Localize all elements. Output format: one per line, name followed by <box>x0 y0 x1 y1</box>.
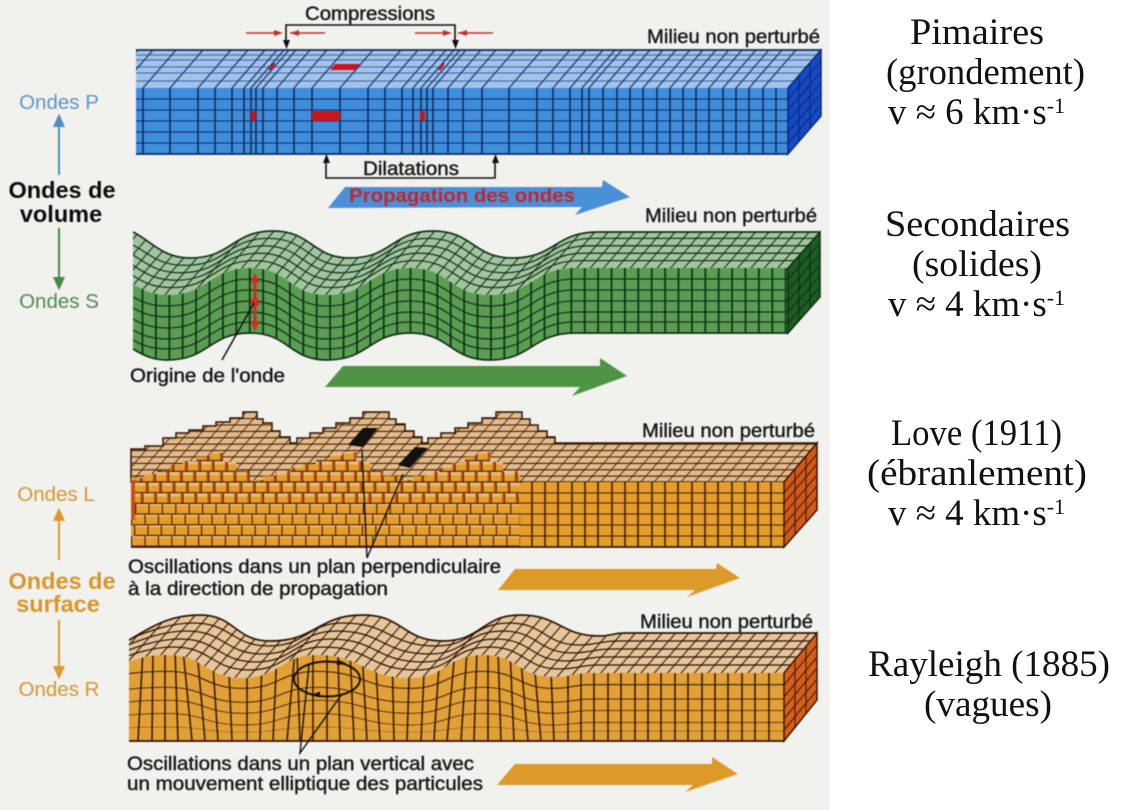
Love block side face <box>784 443 817 547</box>
red compression arrows <box>246 30 493 36</box>
right text: Secondaires: v ≈ 4 km·s <box>888 284 1047 325</box>
P block top grid <box>105 50 817 88</box>
leader lines: oscillations plan perpendiculaire <box>362 450 403 558</box>
Love undisturbed grid <box>520 482 784 547</box>
label: Ondes P: Ondes P <box>19 91 99 114</box>
right text: Primaires: (grondement) <box>886 52 1085 93</box>
right text: Rayleigh: (vagues) <box>924 684 1052 725</box>
Rayleigh block outline <box>129 615 817 741</box>
text: oscillations Rayleigh <box>127 753 483 795</box>
Love staggered rows <box>128 450 528 547</box>
background: diagram area <box>0 0 830 810</box>
dilatations bracket <box>323 154 499 180</box>
red marked particles <box>251 63 445 121</box>
leader: origine de l'onde <box>222 303 254 360</box>
text: oscillations Rayleigh: un mouvement elliptique des particules <box>127 773 483 795</box>
label: Ondes L: Ondes L <box>17 483 95 506</box>
P block side face <box>788 50 821 154</box>
leader lines: oscillations plan vertical <box>300 665 342 753</box>
arrow: green propagation <box>325 358 627 396</box>
arrow: orange propagation Rayleigh <box>497 757 738 792</box>
S block outline <box>133 231 820 360</box>
heading: Ondes de surface: surface <box>16 591 100 617</box>
label: Milieu non perturbé (Rayleigh): Milieu non perturbé <box>640 611 813 633</box>
P block top face <box>136 50 821 88</box>
right text: Love: Love (1911) <box>891 413 1062 454</box>
right text: Secondaires: (solides) <box>912 244 1042 285</box>
Rayleigh block top face <box>129 615 817 678</box>
S block top face <box>133 231 820 295</box>
right text: Rayleigh <box>868 644 1110 725</box>
right text: Love <box>867 413 1087 534</box>
arrow: orange propagation Love <box>498 563 740 597</box>
Love block bottom edge <box>131 546 784 548</box>
Love red edge <box>131 480 135 520</box>
label: Milieu non perturbé (P): Milieu non perturbé <box>647 26 820 48</box>
text: oscillations Love: à la direction de propagation <box>128 578 388 600</box>
text: origine de l'onde: Origine de l'onde <box>130 365 285 387</box>
arrow: blue propagation <box>328 180 630 215</box>
right text: Rayleigh: Rayleigh (1885) <box>868 644 1110 685</box>
right text: Primaires: v ≈ 6 km·s <box>888 92 1047 133</box>
arrow up to Ondes P <box>54 116 64 175</box>
right text: Primaires <box>886 12 1085 133</box>
dilatations text: Dilatations <box>363 158 459 180</box>
right text: Secondaires: Secondaires <box>885 204 1070 245</box>
Rayleigh block front grid <box>100 650 790 741</box>
Rayleigh block side face <box>784 633 817 741</box>
S block front grid <box>132 268 788 360</box>
label: Ondes S: Ondes S <box>19 290 99 313</box>
text: oscillations Love: Oscillations dans un plan perpendiculaire <box>128 556 501 578</box>
heading: Ondes de volume: volume <box>20 201 102 227</box>
S block front face <box>133 268 788 360</box>
left column: ondes de surface <box>8 483 116 701</box>
compressions text: Compressions <box>305 3 435 25</box>
right text: Love: v ≈ 4 km·s <box>888 493 1047 534</box>
arrow down to Ondes S <box>54 228 64 288</box>
heading: Ondes de surface: Ondes de <box>8 568 116 594</box>
S block side face <box>788 232 820 333</box>
elliptical particle motion <box>294 660 360 698</box>
P block front grid <box>136 50 821 154</box>
arrow down to Ondes R <box>54 620 64 677</box>
label: Milieu non perturbé (S): Milieu non perturbé <box>645 205 817 227</box>
panel: P waves block <box>105 26 821 154</box>
heading: Ondes de volume: Ondes de <box>8 177 116 203</box>
diagram: seismic wave blocks and labels <box>8 3 886 795</box>
panel: Love waves block <box>128 412 817 548</box>
right text: Primaires: -1 <box>1047 93 1065 118</box>
P block front face <box>136 88 788 154</box>
arrow up to Ondes L <box>54 510 64 560</box>
right text: Love: -1 <box>1047 494 1065 519</box>
panel: Rayleigh waves block <box>128 612 819 744</box>
label: Ondes R: Ondes R <box>19 678 99 701</box>
Rayleigh block top grid <box>128 615 810 679</box>
Love block top face <box>131 412 817 482</box>
black oscillation bars <box>348 428 428 468</box>
text: oscillations Love <box>128 556 501 600</box>
red origin marker <box>250 273 260 331</box>
S block top grid <box>132 231 814 296</box>
propagation text: Propagation des ondes <box>349 186 575 207</box>
text: oscillations Rayleigh: Oscillations dans un plan vertical avec <box>127 753 474 775</box>
Love block front face <box>128 450 784 548</box>
compressions bracket <box>283 3 459 49</box>
label: Milieu non perturbé (Love): Milieu non perturbé <box>642 420 815 442</box>
right text: Primaires: Pimaires <box>910 12 1044 53</box>
left column: ondes de volume <box>8 91 116 313</box>
Rayleigh block front face <box>129 655 784 741</box>
right text: Secondaires: -1 <box>1047 285 1065 310</box>
right text: Secondaires <box>885 204 1070 325</box>
panel: S waves block <box>132 206 822 362</box>
right text: Love: (ébranlement) <box>867 453 1087 494</box>
